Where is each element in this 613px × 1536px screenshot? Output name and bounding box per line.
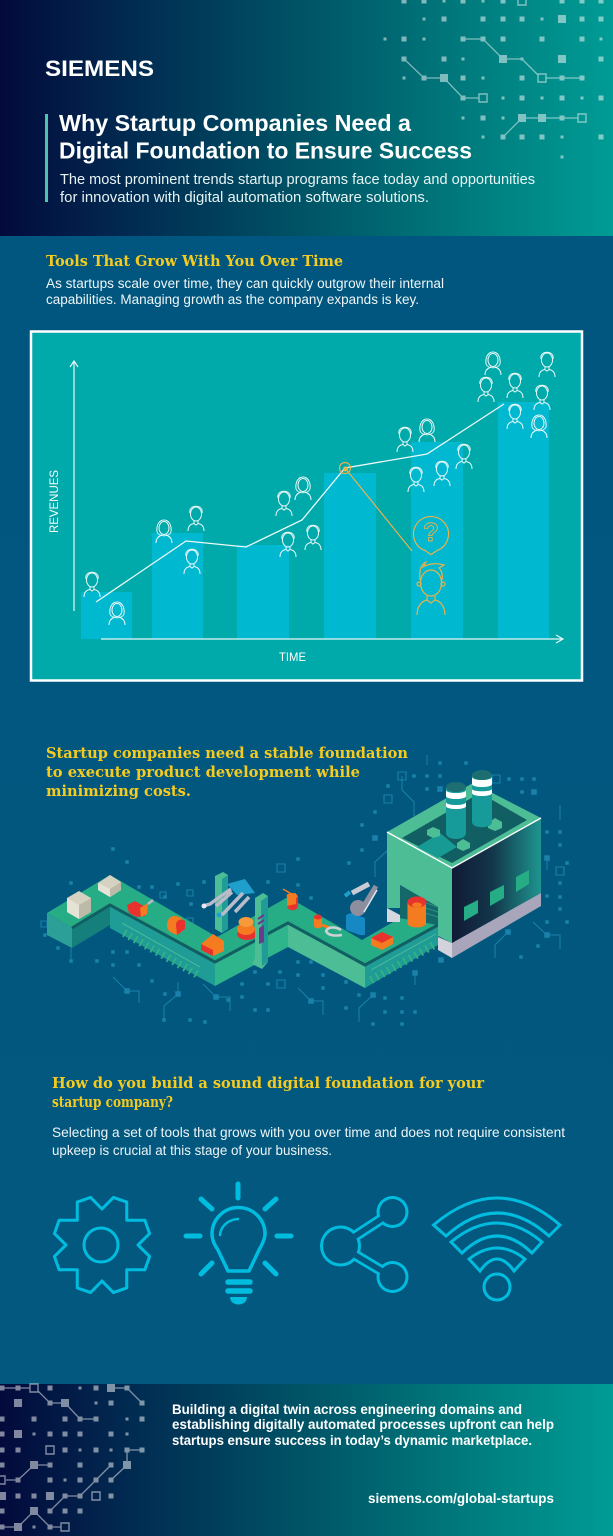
panel: footer xyxy=(0,1384,613,1536)
circuit pattern: footer xyxy=(0,1384,142,1531)
circuit pattern: header xyxy=(385,0,601,157)
factory windows xyxy=(464,870,529,921)
accent bar xyxy=(45,114,48,202)
heading: sound digital foundation: startup company? xyxy=(52,1094,173,1111)
heading: stable foundation xyxy=(46,745,408,800)
text block: closing statement: establishing digitally automated processes upfront can help xyxy=(172,1417,554,1432)
heading: stable foundation: to execute product development while xyxy=(46,764,360,781)
subtitle: for innovation with digital automation software solutions. xyxy=(60,189,429,206)
text block: closing statement: Building a digital twin across engineering domains and xyxy=(172,1402,522,1417)
subtitle xyxy=(60,171,535,206)
heading: stable foundation: Startup companies need a stable foundation xyxy=(46,745,408,762)
subtitle: The most prominent trends startup programs face today and opportunities xyxy=(60,171,535,188)
callout: founder with question: ? xyxy=(423,517,439,547)
circuit dots xyxy=(41,755,567,1024)
text block: tool selection: Selecting a set of tools that grows with you over time and does not require consistent xyxy=(52,1124,565,1140)
factory roof xyxy=(387,783,541,868)
heading: sound digital foundation xyxy=(52,1075,484,1111)
parts on belt xyxy=(127,889,342,956)
team icons xyxy=(84,352,555,625)
logo: Siemens: SIEMENS xyxy=(45,56,154,81)
illustration: factory and conveyor xyxy=(41,755,567,1024)
gantry robot xyxy=(202,872,268,969)
conveyor sides xyxy=(47,905,438,988)
panel: revenue chart xyxy=(31,332,582,680)
text block: tools intro: capabilities. Managing growth as the company expands is key. xyxy=(46,292,419,307)
callout: founder with question xyxy=(340,462,448,615)
growth line xyxy=(96,404,504,602)
icon: gear xyxy=(54,1197,150,1293)
title xyxy=(59,110,472,164)
url: siemens.com/global-startups xyxy=(368,1490,554,1506)
icon: wifi xyxy=(434,1198,560,1300)
heading: sound digital foundation: How do you build a sound digital foundation for your xyxy=(52,1075,484,1092)
text block: tool selection: upkeep is crucial at this stage of your business. xyxy=(52,1142,332,1158)
cartons xyxy=(67,875,121,919)
text block: tools intro: As startups scale over time, they can quickly outgrow their internal xyxy=(46,276,444,291)
text block: closing statement: startups ensure success in today’s dynamic marketplace. xyxy=(172,1433,532,1448)
heading: tools that grow: Tools That Grow With You Over Time xyxy=(46,253,343,270)
axis label: time: TIME xyxy=(279,652,306,664)
conveyor top xyxy=(47,875,438,965)
title: Digital Foundation to Ensure Success xyxy=(59,138,472,164)
icon: share xyxy=(320,1196,408,1293)
text block: tools intro xyxy=(46,276,444,307)
belt in doorway items xyxy=(345,884,426,950)
factory xyxy=(387,770,541,958)
axes xyxy=(70,361,563,643)
bars xyxy=(81,402,549,639)
text block: closing statement xyxy=(172,1402,554,1448)
panel: header xyxy=(0,0,613,236)
smokestacks xyxy=(472,775,492,827)
icon: light bulb xyxy=(186,1184,291,1304)
text block: tool selection xyxy=(52,1124,565,1158)
axis label: revenues: REVENUES xyxy=(49,470,61,533)
title: Why Startup Companies Need a xyxy=(59,110,412,136)
heading: stable foundation: minimizing costs. xyxy=(46,783,191,800)
